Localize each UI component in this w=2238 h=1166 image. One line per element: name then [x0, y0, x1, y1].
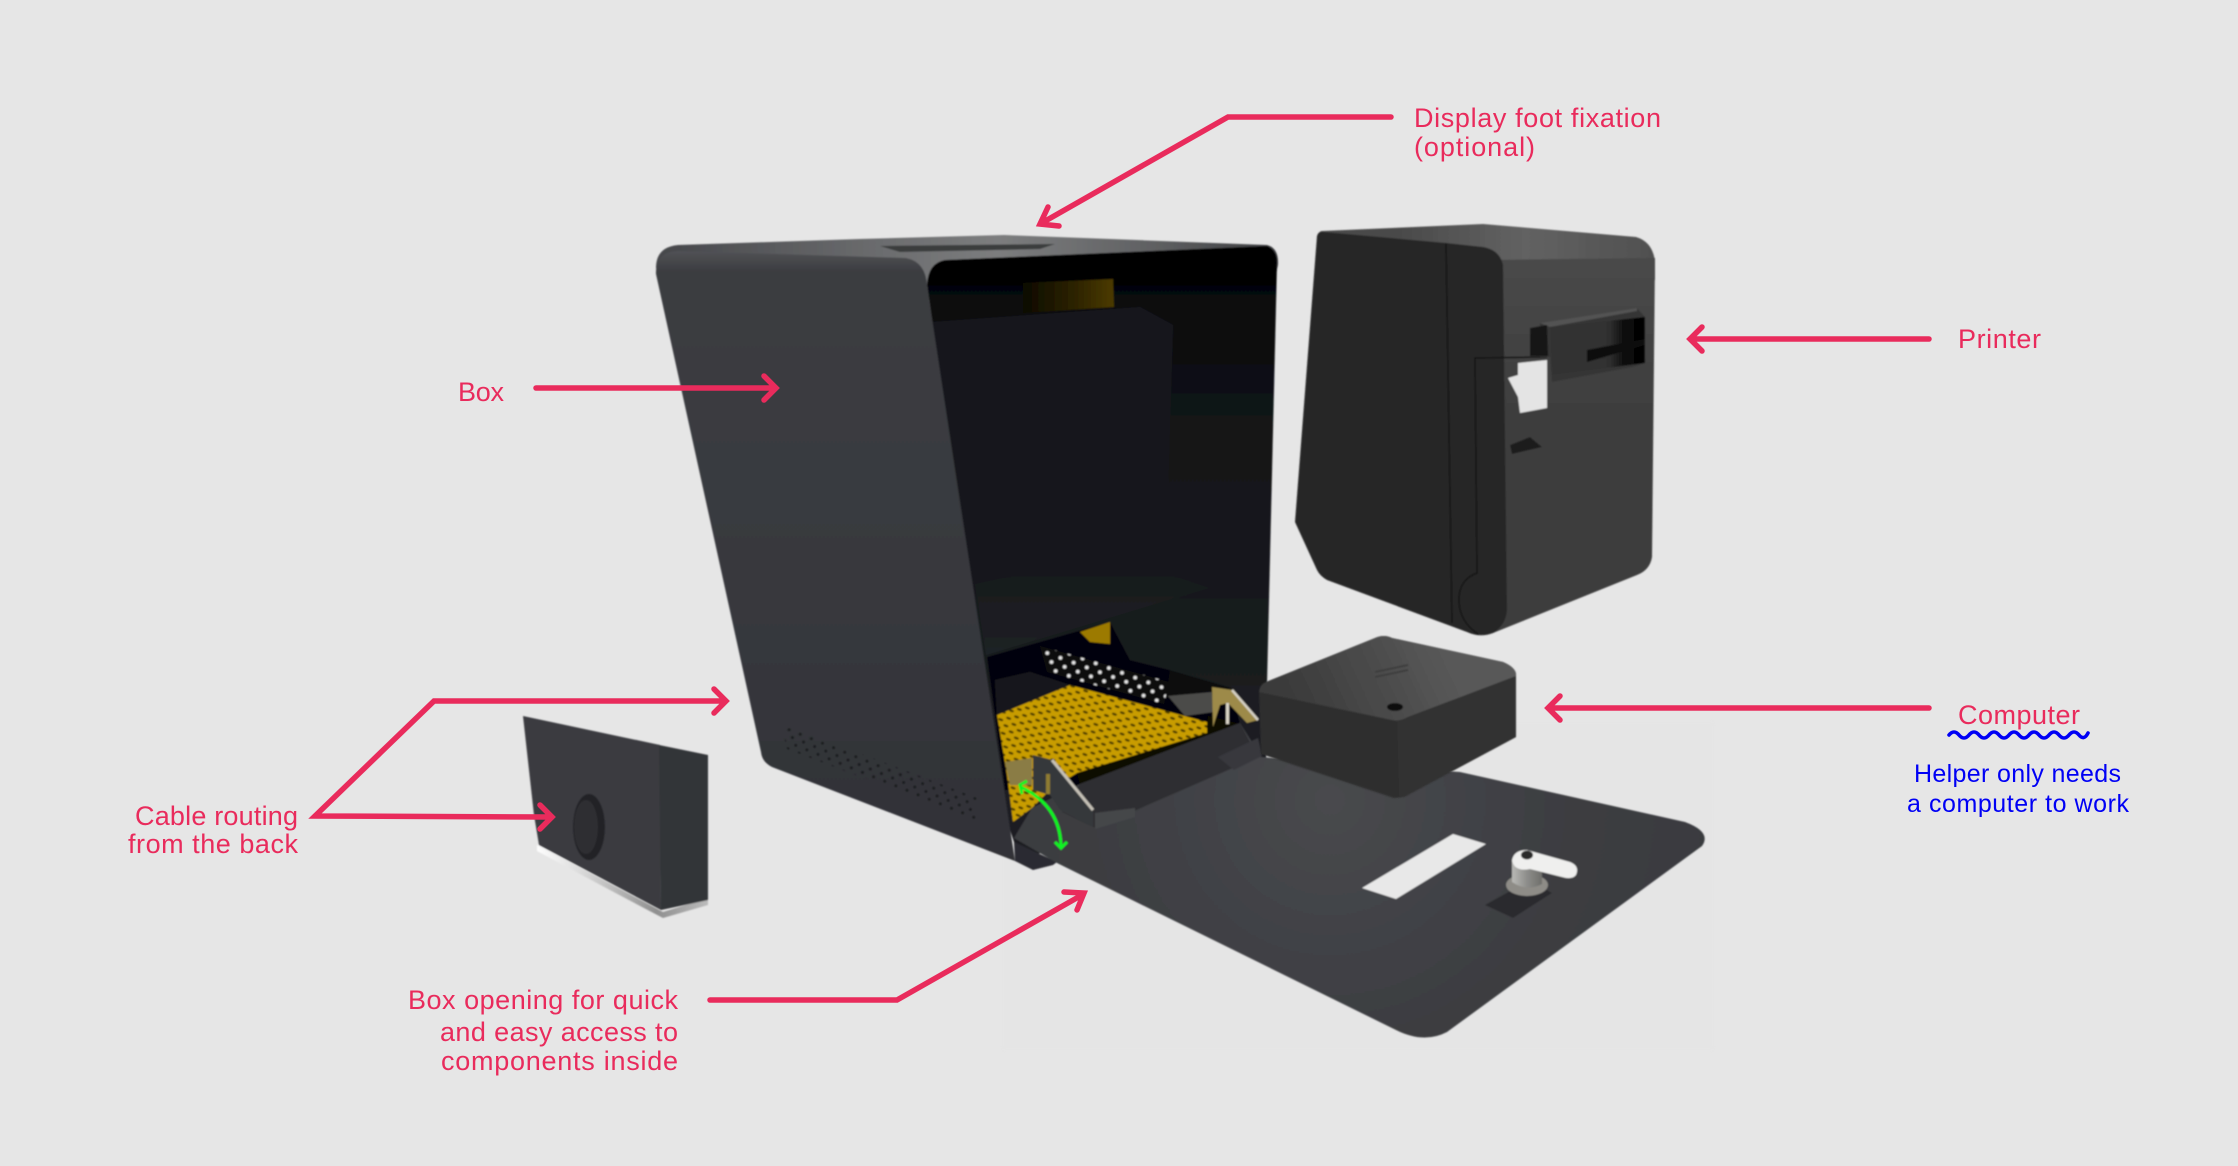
- slot left shadow bar: [1530, 325, 1548, 356]
- box interior and right wall: [927, 246, 1277, 860]
- dark component on tray: [995, 672, 1070, 716]
- right hinge assembly: [1166, 670, 1258, 727]
- printer side face: [1295, 232, 1507, 635]
- label: Box: [458, 377, 504, 407]
- vent perforations: [781, 723, 977, 820]
- computer top face: [1259, 636, 1516, 721]
- label: Printer: [1958, 324, 2041, 354]
- box foot under door: [1014, 842, 1057, 870]
- arrow to computer: [1548, 696, 1929, 720]
- inner shelf: [975, 553, 1209, 655]
- callout: cable routing: [128, 689, 726, 859]
- paper slot cut-out: [1362, 834, 1486, 899]
- inset back face: [523, 716, 661, 910]
- product: small computer: [1259, 636, 1516, 798]
- printer seam: [1446, 243, 1452, 623]
- latch shaft: [1512, 860, 1542, 888]
- dark block: [1166, 670, 1232, 698]
- callout: printer: [1690, 324, 2041, 354]
- arrow to printer: [1690, 327, 1929, 351]
- small ledge: [1510, 437, 1542, 454]
- helper note: Helper only needs: [1914, 760, 2121, 788]
- label: Cable routing: [135, 801, 298, 831]
- label: components inside: [441, 1046, 678, 1076]
- product: box with open door: [656, 235, 1705, 1038]
- computer engraved mark: [1375, 665, 1408, 677]
- upper yellow perforated tray glimpse: [1023, 279, 1114, 313]
- latch handle: [1512, 850, 1577, 878]
- label: and easy access to: [440, 1017, 678, 1047]
- arc: [1021, 787, 1061, 846]
- bracket bright edge: [1232, 690, 1258, 720]
- inner back wall: [932, 307, 1140, 584]
- box top surface: [656, 235, 1278, 300]
- inset: back of the box with cable hole: [523, 716, 708, 918]
- inner side wall panel: [1111, 307, 1209, 588]
- grommet centre: [574, 800, 598, 854]
- label: Box opening for quick: [408, 985, 678, 1015]
- callout: computer: [1548, 696, 2130, 818]
- tray front shadow: [1077, 716, 1240, 784]
- latch hole: [1521, 850, 1533, 860]
- helper note: a computer to work: [1907, 790, 2130, 818]
- bracket plate: [1033, 755, 1093, 827]
- green open/close arc: [1020, 781, 1067, 848]
- printer door line: [1459, 357, 1547, 634]
- lower compartment: [987, 622, 1240, 790]
- paper slot recess: [1550, 317, 1645, 375]
- label: Computer: [1958, 700, 2080, 730]
- printer front face: [1480, 258, 1655, 633]
- photo backdrop: [1000, 720, 1716, 1052]
- inset side face: [659, 745, 708, 910]
- computer silhouette: [1259, 636, 1516, 798]
- cable grommet: [573, 794, 605, 860]
- yellow perforated tray: [997, 685, 1240, 822]
- arrow to door: [710, 892, 1084, 1000]
- latch: [1485, 850, 1577, 918]
- label: Display foot fixation: [1414, 103, 1661, 133]
- arrow to display foot fixation: [1040, 117, 1391, 226]
- arc arrowhead top: [1020, 781, 1027, 794]
- bracket metal edge: [1052, 760, 1093, 810]
- printer top face: [1317, 224, 1655, 280]
- computer screw hole: [1387, 703, 1403, 711]
- computer right face: [1397, 676, 1516, 797]
- forked arrows to the back of the box: [315, 689, 726, 829]
- rail mounting foot right: [1218, 738, 1262, 770]
- inset shadow: [537, 845, 708, 918]
- box side panel: [656, 251, 1015, 861]
- paper slot lip: [1540, 308, 1637, 327]
- small yellow patch under shelf: [1080, 622, 1110, 644]
- arrow to box: [536, 376, 776, 400]
- callout: box: [458, 376, 776, 407]
- arc arrowhead bottom: [1055, 842, 1067, 848]
- top display foot plate: [880, 244, 1055, 252]
- tray top surface: [997, 685, 1207, 822]
- door plate: [1014, 723, 1705, 1038]
- hinge cylinder: [1168, 692, 1214, 716]
- paper slot shadow band: [1587, 339, 1645, 362]
- callout: box opening: [408, 892, 1084, 1076]
- door rail: [1062, 723, 1258, 828]
- wavy underline: [1949, 732, 2088, 738]
- tan bracket face: [1212, 687, 1258, 727]
- callout: display foot fixation: [1040, 103, 1661, 226]
- label: from the back: [128, 829, 298, 859]
- bracket slot: [1226, 703, 1229, 724]
- bracket slot: [1046, 774, 1050, 794]
- latch nut: [1506, 874, 1548, 896]
- product: receipt printer: [1295, 224, 1655, 635]
- bracket foot: [1095, 808, 1135, 829]
- receipt paper: [1508, 360, 1547, 413]
- tray white dot corner: [1005, 758, 1032, 785]
- paper slot surround: [1540, 308, 1645, 382]
- perforated white-dot wall: [1040, 646, 1169, 704]
- label: (optional): [1414, 132, 1535, 162]
- latch base plate: [1485, 880, 1552, 918]
- left bracket: [1033, 755, 1135, 829]
